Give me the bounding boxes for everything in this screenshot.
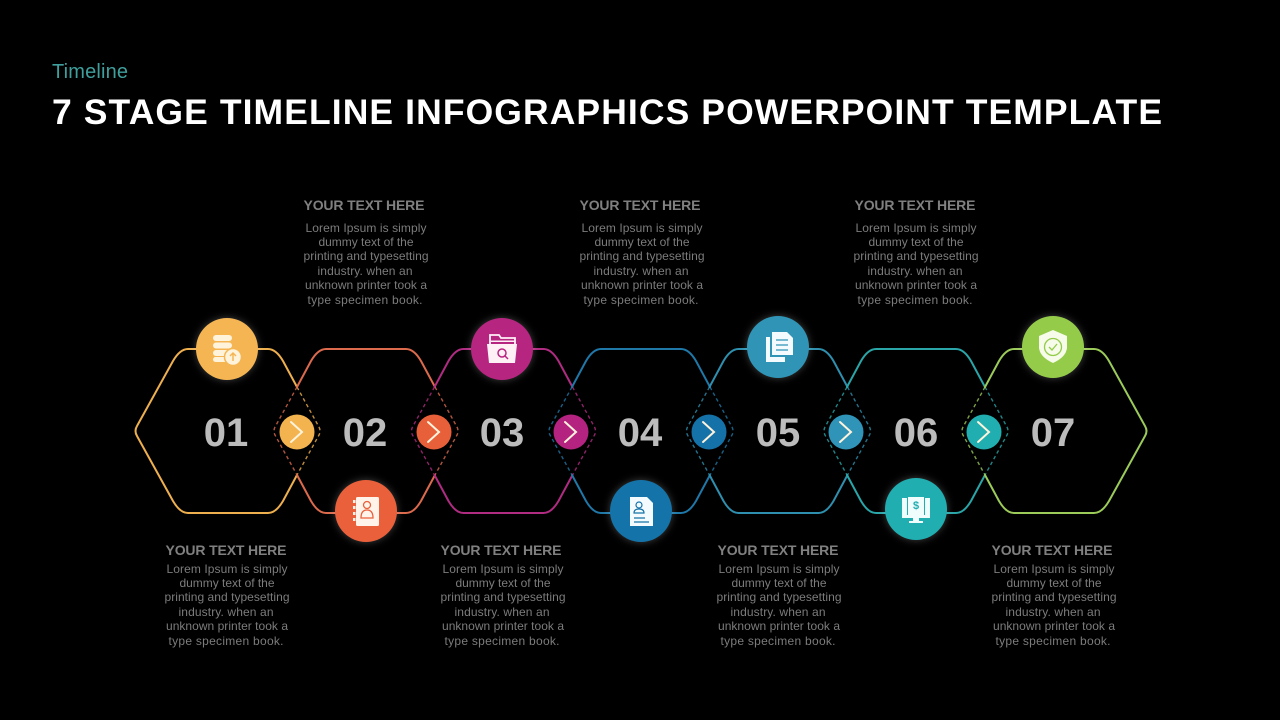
text block 01 (bottom): industry. when an <box>178 605 274 619</box>
text block 07 (bottom): printing and typesetting <box>992 590 1116 604</box>
stage numbers: 03 <box>480 411 524 455</box>
text block 05 (bottom): printing and typesetting <box>716 590 842 604</box>
text block 04 (top): YOUR TEXT HERE <box>580 197 700 213</box>
text block 07 (bottom): industry. when an <box>1006 605 1100 619</box>
text block 05 (bottom): Lorem Ipsum is simply <box>718 562 840 576</box>
text block 05 (bottom): unknown printer took a <box>718 619 840 633</box>
text block 06 (top): type specimen book. <box>858 293 972 307</box>
hexagon 03 outline <box>412 349 596 513</box>
text block 01 (bottom): YOUR TEXT HERE <box>166 542 286 558</box>
text block 02 (top): YOUR TEXT HERE <box>304 197 424 213</box>
text block 05 (bottom): industry. when an <box>730 605 826 619</box>
text block 04 (top): dummy text of the <box>594 235 690 249</box>
text block 02 (top): type specimen book. <box>308 293 422 307</box>
text block 04 (top): type specimen book. <box>584 293 698 307</box>
text block 06 (top): YOUR TEXT HERE <box>854 197 976 213</box>
text block 07 (bottom) <box>992 542 1116 648</box>
title: 7 STAGE TIMELINE INFOGRAPHICS POWERPOINT TEMPLATE <box>52 92 1162 132</box>
stage numbers: 06 <box>894 411 938 455</box>
text block 05 (bottom) <box>716 542 842 648</box>
hexagon chain <box>136 349 1146 513</box>
icon badge 6: monitor with dollar: $ <box>913 500 919 512</box>
text block 06 (top): printing and typesetting <box>854 249 978 263</box>
text block 04 (top) <box>580 197 704 307</box>
text block 03 (bottom): printing and typesetting <box>440 590 566 604</box>
stage numbers: 04 <box>618 411 663 455</box>
text block 05 (bottom): dummy text of the <box>732 576 827 590</box>
text block 01 (bottom): unknown printer took a <box>166 619 288 633</box>
text block 06 (top) <box>854 197 978 307</box>
text block 04 (top): industry. when an <box>594 264 688 278</box>
text block 03 (bottom): type specimen book. <box>444 634 560 648</box>
text block 01 (bottom): Lorem Ipsum is simply <box>166 562 288 576</box>
icon badge 1: database with upload <box>196 318 258 380</box>
icon badge 3: folder with magnifier <box>471 318 533 380</box>
icon badge 2: contact notebook <box>335 480 397 542</box>
stage numbers <box>204 411 1075 455</box>
eyebrow: Timeline: Timeline <box>52 61 128 83</box>
text block 05 (bottom): YOUR TEXT HERE <box>718 542 838 558</box>
text block 02 (top): unknown printer took a <box>305 278 427 292</box>
text block 03 (bottom): dummy text of the <box>456 576 551 590</box>
hexagon 04 outline <box>549 349 733 513</box>
text block 03 (bottom) <box>440 542 566 648</box>
text block 06 (top): Lorem Ipsum is simply <box>856 221 976 235</box>
text block 06 (top): dummy text of the <box>868 235 964 249</box>
text block 04 (top): unknown printer took a <box>581 278 703 292</box>
text block 02 (top): industry. when an <box>318 264 412 278</box>
arrow badge 5 <box>828 414 864 450</box>
text block 02 (top) <box>304 197 428 307</box>
text block 07 (bottom): YOUR TEXT HERE <box>992 542 1112 558</box>
hexagon 05 outline <box>686 349 870 513</box>
text block 07 (bottom): type specimen book. <box>996 634 1110 648</box>
hexagon 07 outline <box>962 349 1146 513</box>
arrow badge 3 <box>554 414 588 450</box>
arrow badge 1 <box>280 414 314 450</box>
text block 04 (top): printing and typesetting <box>580 249 704 263</box>
text block 02 (top): Lorem Ipsum is simply <box>306 221 426 235</box>
text block 06 (top): unknown printer took a <box>855 278 977 292</box>
arrow badge 6 <box>966 414 1002 450</box>
text block 01 (bottom): dummy text of the <box>180 576 275 590</box>
text block 01 (bottom): printing and typesetting <box>164 590 290 604</box>
text block 03 (bottom): unknown printer took a <box>442 619 564 633</box>
text block 07 (bottom): dummy text of the <box>1006 576 1102 590</box>
icon badge 6: monitor with dollar <box>885 478 947 540</box>
text block 02 (top): dummy text of the <box>318 235 414 249</box>
text block 05 (bottom): type specimen book. <box>720 634 836 648</box>
icon badge 4: profile document <box>610 480 672 542</box>
hexagon 06 outline <box>824 349 1008 513</box>
text block 03 (bottom): industry. when an <box>454 605 550 619</box>
text block 06 (top): industry. when an <box>868 264 962 278</box>
icon badge 7: shield with check <box>1022 316 1084 378</box>
stage numbers: 07 <box>1031 411 1075 455</box>
arrow badge 2 <box>416 414 452 450</box>
hexagon 02 outline <box>274 349 458 513</box>
stage numbers: 02 <box>343 411 387 455</box>
text block 07 (bottom): unknown printer took a <box>993 619 1115 633</box>
text block 03 (bottom): Lorem Ipsum is simply <box>442 562 564 576</box>
stage numbers: 05 <box>756 411 800 455</box>
stage numbers: 01 <box>204 411 248 455</box>
hexagon 01 outline <box>136 349 320 513</box>
text block 07 (bottom): Lorem Ipsum is simply <box>994 562 1114 576</box>
text block 02 (top): printing and typesetting <box>304 249 428 263</box>
icon badge 5: stacked documents <box>747 316 809 378</box>
text block 01 (bottom): type specimen book. <box>168 634 284 648</box>
arrow badge 4 <box>692 414 726 450</box>
text block 04 (top): Lorem Ipsum is simply <box>582 221 702 235</box>
text block 01 (bottom) <box>164 542 290 648</box>
text block 03 (bottom): YOUR TEXT HERE <box>440 542 562 558</box>
